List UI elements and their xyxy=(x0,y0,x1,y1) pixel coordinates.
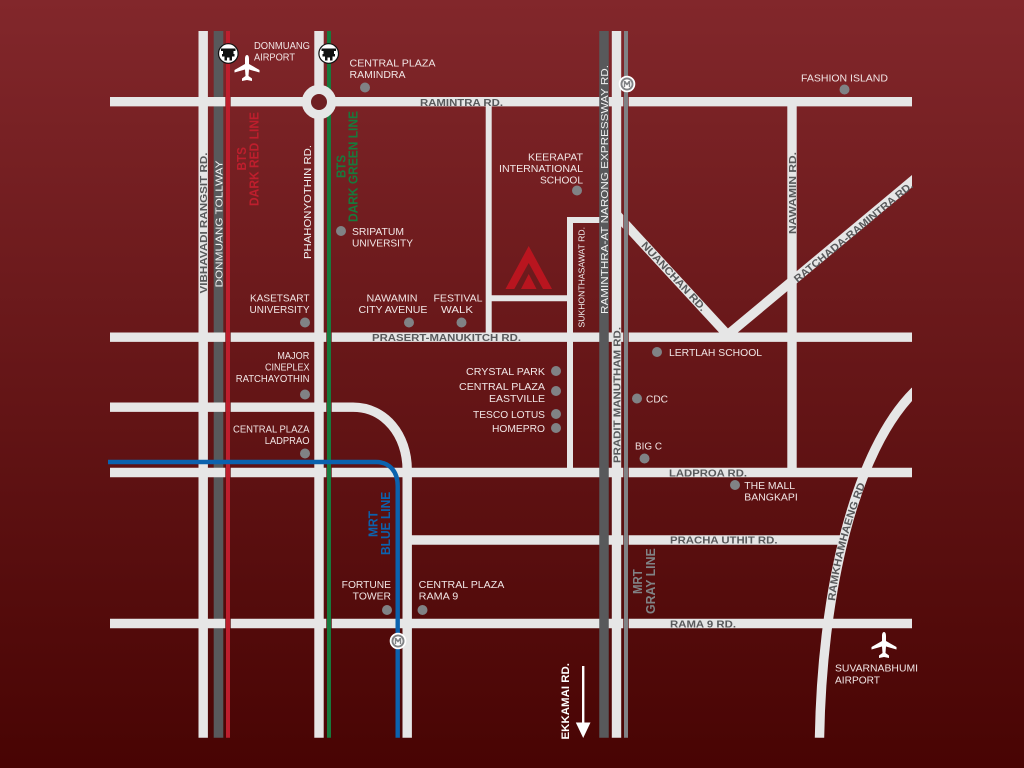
place labels: FORTUNE xyxy=(342,580,391,591)
place labels: LADPRAO xyxy=(265,436,310,447)
place labels: CENTRAL PLAZA xyxy=(419,580,505,591)
vertical road names: PRADIT MANUTHAM RD. xyxy=(611,327,623,463)
Rama 9 road xyxy=(110,619,912,628)
Ramkhamhaeng road xyxy=(820,391,915,738)
place labels: CENTRAL PLAZA xyxy=(233,424,310,436)
transit line labels: MRT xyxy=(366,511,380,537)
vertical road names: SUKHONTHASAWAT RD. xyxy=(576,227,586,328)
place labels xyxy=(233,41,918,686)
Raminthra service road xyxy=(612,31,621,738)
place labels: SUVARNABHUMI xyxy=(835,664,918,674)
place labels: HOMEPRO xyxy=(492,424,545,435)
vertical road names xyxy=(198,65,799,740)
place labels: SRIPATUM xyxy=(352,227,404,238)
transit line labels: BTS xyxy=(334,155,348,178)
transit line labels: GRAY LINE xyxy=(644,548,658,614)
Ratchada-Ramintra road xyxy=(725,174,920,337)
vertical road names: PHAHONYOTHIN RD. xyxy=(302,145,314,259)
place labels: DONMUANG xyxy=(254,41,310,52)
roundabout xyxy=(306,89,332,115)
Sukhonthasawat road xyxy=(570,220,604,472)
icon: MRT station gray line xyxy=(620,77,634,91)
horizontal road names: RAMA 9 RD. xyxy=(670,618,736,630)
transit line labels: DARK GREEN LINE xyxy=(346,111,360,222)
place labels: MAJOR xyxy=(277,351,309,362)
icon: plane Donmuang xyxy=(234,55,260,81)
place labels: EASTVILLE xyxy=(489,394,545,405)
Pracha Uthit road xyxy=(407,535,842,545)
place labels: UNIVERSITY xyxy=(352,238,413,250)
place labels: FESTIVAL xyxy=(434,294,483,304)
Nawamin road xyxy=(787,102,797,472)
place labels: KASETSART xyxy=(250,294,310,304)
place labels: WALK xyxy=(441,305,473,316)
Donmuang Tollway xyxy=(214,31,223,738)
vertical road names: VIBHAVADI RANGSIT RD. xyxy=(198,152,210,294)
icon: BTS station green line xyxy=(319,44,339,63)
vertical road names: DONMUANG TOLLWAY xyxy=(214,160,226,288)
place labels: CITY AVENUE xyxy=(358,305,428,316)
BTS dark red line xyxy=(226,31,230,738)
horizontal road names: PRACHA UTHIT RD. xyxy=(670,534,778,546)
place labels: CINEPLEX xyxy=(265,362,310,374)
Nuanchan road xyxy=(617,215,730,338)
place labels: THE MALL xyxy=(744,481,795,492)
place labels: CENTRAL PLAZA xyxy=(459,382,545,393)
transit line labels xyxy=(235,111,658,614)
Festival Walk connector xyxy=(488,295,570,301)
vertical road names: EKKAMAI RD. xyxy=(560,663,572,740)
transit line labels: DARK RED LINE xyxy=(248,112,262,206)
place labels: CRYSTAL PARK xyxy=(466,367,545,378)
place labels: KEERAPAT xyxy=(528,152,583,164)
soi connector road xyxy=(486,102,492,337)
transit line labels: BTS xyxy=(235,147,249,170)
place labels: AIRPORT xyxy=(835,676,880,686)
horizontal road names xyxy=(372,97,778,631)
place labels: RAMA 9 xyxy=(419,592,459,602)
place labels: SCHOOL xyxy=(540,176,583,186)
Prasert-Manukitch road xyxy=(110,333,912,342)
place labels: FASHION ISLAND xyxy=(801,74,888,84)
rail line gaps across roads xyxy=(228,31,626,738)
place labels: BIG C xyxy=(635,442,662,452)
road network xyxy=(110,31,920,738)
MRT blue line xyxy=(108,462,398,738)
Ramintra road xyxy=(110,97,912,106)
location dots xyxy=(300,82,850,615)
place labels: LERTLAH SCHOOL xyxy=(669,348,762,359)
Vibhavadi Rangsit road xyxy=(198,31,208,738)
icon: BTS station red line xyxy=(218,44,238,63)
icon: plane Suvarnabhumi xyxy=(872,632,896,658)
place labels: CENTRAL PLAZA xyxy=(350,58,436,70)
vertical road names: NAWAMIN RD. xyxy=(787,152,799,234)
place labels: RATCHAYOTHIN xyxy=(236,374,310,385)
diagonal road names: RAMKHAMHAENG RD. xyxy=(828,483,864,600)
expressway xyxy=(599,31,609,738)
diagonal road names: RATCHADA-RAMINTRA RD. xyxy=(792,180,916,285)
arrow: to Ekkamai xyxy=(576,666,590,738)
place labels: INTERNATIONAL xyxy=(499,164,583,175)
place labels: RAMINDRA xyxy=(350,70,406,81)
BTS dark green line xyxy=(327,31,331,738)
place labels: CDC xyxy=(646,394,668,406)
logo xyxy=(506,246,552,289)
place labels: BANGKAPI xyxy=(744,492,798,504)
place labels: AIRPORT xyxy=(254,52,295,64)
diagonal road names: NUANCHAN RD. xyxy=(638,240,708,314)
diagonal road names xyxy=(638,180,916,600)
transit line labels: MRT xyxy=(631,569,645,594)
vertical road names: RAMINTHRA-AT NARONG EXPRESSWAY RD. xyxy=(599,65,611,314)
icon: MRT station blue line xyxy=(391,634,405,648)
Phahonyothin road xyxy=(314,31,324,738)
transit line labels: BLUE LINE xyxy=(379,492,393,555)
curved road to Rama 9 xyxy=(110,407,407,738)
place labels: UNIVERSITY xyxy=(250,305,310,316)
horizontal road names: RAMINTRA RD. xyxy=(420,97,503,109)
place labels: TOWER xyxy=(353,592,391,602)
MRT gray line xyxy=(624,31,628,738)
place labels: TESCO LOTUS xyxy=(473,410,545,421)
horizontal road names: LADPROA RD. xyxy=(669,467,747,479)
Ladprao road xyxy=(110,468,912,477)
horizontal road names: PRASERT-MANUKITCH RD. xyxy=(372,332,521,344)
place labels: NAWAMIN xyxy=(366,294,418,304)
